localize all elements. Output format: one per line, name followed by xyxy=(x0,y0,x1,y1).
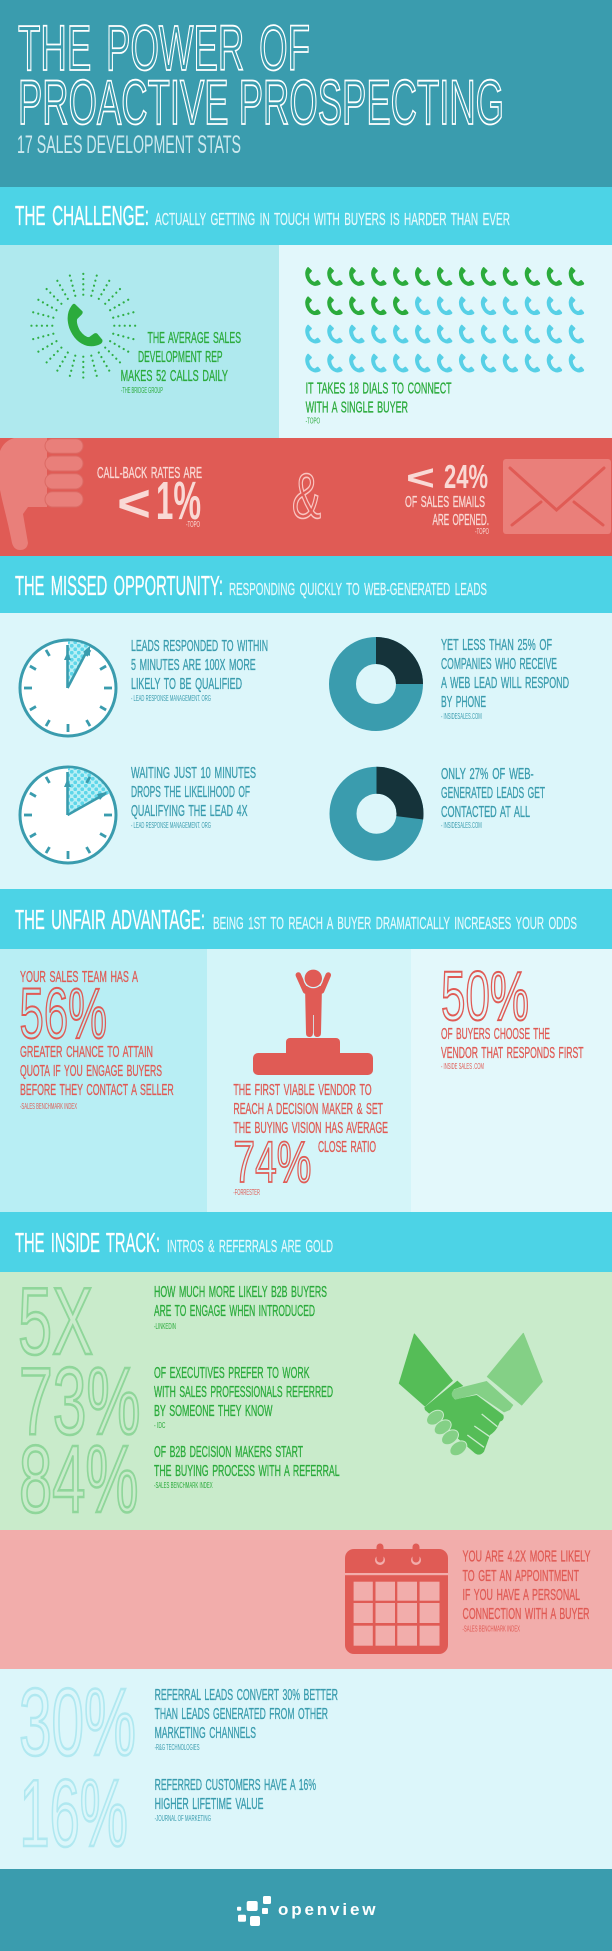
panel: pink appointment xyxy=(0,1530,612,1669)
stat text: 73%: - IDC xyxy=(154,1421,166,1430)
phone grid: dials xyxy=(305,267,584,372)
stat text: 16%: -JOURNAL OF MARKETING xyxy=(155,1814,211,1823)
stat text: quota: QUOTA IF YOU ENGAGE BUYERS xyxy=(20,1063,162,1080)
stat text: 27% contacted xyxy=(441,766,545,830)
logo: openview wordmark: openview xyxy=(278,1900,376,1919)
stat text: 16%: REFERRED CUSTOMERS HAVE A 16% xyxy=(155,1777,316,1794)
stat text: quota: BEFORE THEY CONTACT A SELLER xyxy=(20,1082,174,1099)
stat text: 18 dials: IT TAKES 18 DIALS TO CONNECT xyxy=(306,381,452,398)
stat text: quota xyxy=(20,1044,174,1111)
panel: daily calls xyxy=(0,245,279,438)
stat: call-back rates: < xyxy=(117,475,151,533)
stat text: 73% xyxy=(154,1365,333,1430)
stat text: 52 calls: MAKES 52 CALLS DAILY xyxy=(121,368,228,385)
stat text: 73%: WITH SALES PROFESSIONALS REFERRED xyxy=(154,1384,333,1401)
logo: openview mark xyxy=(237,1896,271,1926)
stat text: 18 dials: -TOPO xyxy=(306,416,320,426)
big number: 56%: 56% xyxy=(20,975,107,1054)
stat text: 27% contacted: CONTACTED AT ALL xyxy=(441,804,530,821)
stat text: quota: GREATER CHANCE TO ATTAIN xyxy=(20,1044,153,1061)
stat text: 25% of companies: BY PHONE xyxy=(441,694,486,711)
stat text: 10 minutes: QUALIFYING THE LEAD 4X xyxy=(131,803,248,820)
stat text: 52 calls xyxy=(121,330,241,395)
section band: the challenge: THE CHALLENGE: xyxy=(15,200,149,231)
stat text: 25% of companies xyxy=(441,637,569,721)
icon: clock 10 minutes xyxy=(20,767,116,863)
stat text: 5x xyxy=(154,1284,327,1331)
icon: handshake xyxy=(399,1333,542,1459)
header xyxy=(0,0,612,187)
stat text: 10 minutes: DROPS THE LIKELIHOOD OF xyxy=(131,784,250,801)
stat text: 5 minutes: LEADS RESPONDED TO WITHIN xyxy=(131,638,268,655)
stat text: 5x: ARE TO ENGAGE WHEN INTRODUCED xyxy=(154,1303,315,1320)
stat text: 84%: -SALES BENCHMARK INDEX xyxy=(154,1481,213,1490)
stat text: 52 calls: DEVELOPMENT REP xyxy=(138,349,222,366)
title line 1: THE POWER OF xyxy=(18,12,310,84)
footer xyxy=(0,1869,612,1951)
icon: person on podium xyxy=(253,968,373,1075)
stat text: appointment xyxy=(462,1549,590,1634)
chart: donut 27% xyxy=(343,780,410,847)
panel: missed opportunity stats xyxy=(0,613,612,889)
stat: sales emails: < xyxy=(406,457,435,498)
subtitle: 17 SALES DEVELOPMENT STATS xyxy=(17,131,241,159)
icon: calendar xyxy=(345,1547,448,1654)
panel: 56% quota xyxy=(0,949,207,1212)
stat: sales emails: OF SALES EMAILS xyxy=(405,494,485,511)
panel: 50% of buyers xyxy=(411,949,612,1212)
stat text: first vendor xyxy=(233,1082,388,1137)
stat text: 73%: OF EXECUTIVES PREFER TO WORK xyxy=(154,1365,310,1382)
big number: 74%: 74% xyxy=(233,1130,311,1195)
section band: the missed opportunity xyxy=(0,556,612,613)
stat text: 5x: -LINKEDIN xyxy=(154,1322,176,1331)
stat text: 30%: MARKETING CHANNELS xyxy=(155,1725,256,1742)
big number: 50%: 50% xyxy=(441,957,529,1035)
panel: 18 dials xyxy=(279,245,612,438)
stat text: 30%: THAN LEADS GENERATED FROM OTHER xyxy=(155,1706,328,1723)
stat text: 25% of companies: - INSIDESALES.COM xyxy=(441,712,482,721)
section band: the inside track: THE INSIDE TRACK: xyxy=(15,1227,160,1258)
stat text: 30% xyxy=(155,1687,338,1752)
stat: call-back rates: -TOPO xyxy=(186,520,200,529)
icon: envelope xyxy=(503,459,611,534)
ampersand: & xyxy=(292,460,321,532)
stat: call-back rates: CALL-BACK RATES ARE xyxy=(97,465,202,482)
stat text: 84%: OF B2B DECISION MAKERS START xyxy=(154,1444,303,1461)
stat text: 73%: BY SOMEONE THEY KNOW xyxy=(154,1403,273,1420)
stat text: 10 minutes xyxy=(131,765,256,830)
stat text: 5x: HOW MUCH MORE LIKELY B2B BUYERS xyxy=(154,1284,327,1301)
stat text: 18 dials: WITH A SINGLE BUYER xyxy=(306,400,408,417)
panel: green intros xyxy=(0,1268,612,1533)
section band: the unfair advantage xyxy=(0,889,612,949)
big number: 5X: 5X xyxy=(18,1268,93,1375)
stat text: 52 calls: -THE BRIDGE GROUP xyxy=(121,386,163,395)
stat text: 30%: -R&G TECHNOLOGIES xyxy=(155,1743,200,1752)
stat: sales emails: ARE OPENED. xyxy=(432,512,489,529)
stat text: 18 dials xyxy=(306,381,452,426)
stat text: 16% xyxy=(155,1777,316,1823)
big number: 30%: 30% xyxy=(19,1669,136,1776)
stat text: 84% xyxy=(154,1444,340,1490)
section band: the unfair advantage: THE UNFAIR ADVANTAGE: xyxy=(15,904,205,935)
icon: clock 5 minutes xyxy=(20,640,116,736)
stat: call-back rates: 1% xyxy=(156,471,201,531)
section band: the inside track: INTROS & REFERRALS ARE GOLD xyxy=(167,1236,333,1256)
panel: light referral stats xyxy=(0,1669,612,1869)
stat text: 10 minutes: - LEAD RESPONSE MANAGEMENT. ORG xyxy=(131,821,211,830)
stat text: appointment: -SALES BENCHMARK INDEX xyxy=(462,1625,520,1634)
panel: 56% quota: YOUR SALES TEAM HAS A xyxy=(20,969,138,986)
stat text: quota: -SALES BENCHMARK INDEX xyxy=(20,1102,77,1111)
stat text: 5 minutes xyxy=(131,638,268,703)
stat text: 27% contacted: - INSIDESALES.COM xyxy=(441,821,482,830)
chart: donut 25% xyxy=(342,650,410,718)
section band: the inside track xyxy=(0,1212,612,1272)
big number: 84%: 84% xyxy=(19,1426,138,1533)
stat: call-back rates xyxy=(97,465,202,533)
panel: first vendor 74% xyxy=(207,949,411,1212)
icon: ringing phone xyxy=(31,273,136,378)
stat: sales emails: 24% xyxy=(444,458,488,495)
stat text: 27% contacted: ONLY 27% OF WEB- xyxy=(441,766,534,783)
stat text: 5 minutes: LIKELY TO BE QUALIFIED xyxy=(131,676,242,693)
stat text: first vendor: THE BUYING VISION HAS AVERAGE xyxy=(233,1120,388,1137)
panel: red response rates band xyxy=(0,438,612,556)
section band: the missed opportunity: THE MISSED OPPORTUNITY: xyxy=(15,570,223,601)
close ratio label: CLOSE RATIO xyxy=(318,1139,376,1156)
big number: 16%: 16% xyxy=(20,1760,128,1867)
section band: the challenge xyxy=(0,187,612,245)
stat text: first vendor: REACH A DECISION MAKER & SET xyxy=(233,1101,383,1118)
stat text: 84%: THE BUYING PROCESS WITH A REFERRAL xyxy=(154,1463,340,1480)
stat text: first vendor: THE FIRST VIABLE VENDOR TO xyxy=(233,1082,372,1099)
stat text: responds first xyxy=(441,1026,584,1071)
stat: sales emails xyxy=(405,457,489,536)
stat text: 10 minutes: WAITING JUST 10 MINUTES xyxy=(131,765,256,782)
icon: thumbs down xyxy=(0,438,83,550)
stat text: 5 minutes: 5 MINUTES ARE 100X MORE xyxy=(131,657,256,674)
big number: 73%: 73% xyxy=(19,1348,140,1455)
stat text: 30%: REFERRAL LEADS CONVERT 30% BETTER xyxy=(155,1687,338,1704)
stat text: 16%: HIGHER LIFETIME VALUE xyxy=(155,1796,264,1813)
stat: sales emails: -TOPO xyxy=(475,527,489,536)
stat text: responds first: - INSIDE SALES .COM xyxy=(441,1062,484,1071)
source: forrester: -FORRESTER xyxy=(233,1188,260,1197)
stat text: 52 calls: THE AVERAGE SALES xyxy=(148,330,241,347)
stat text: 5 minutes: - LEAD RESPONSE MANAGEMENT. ORG xyxy=(131,694,211,703)
